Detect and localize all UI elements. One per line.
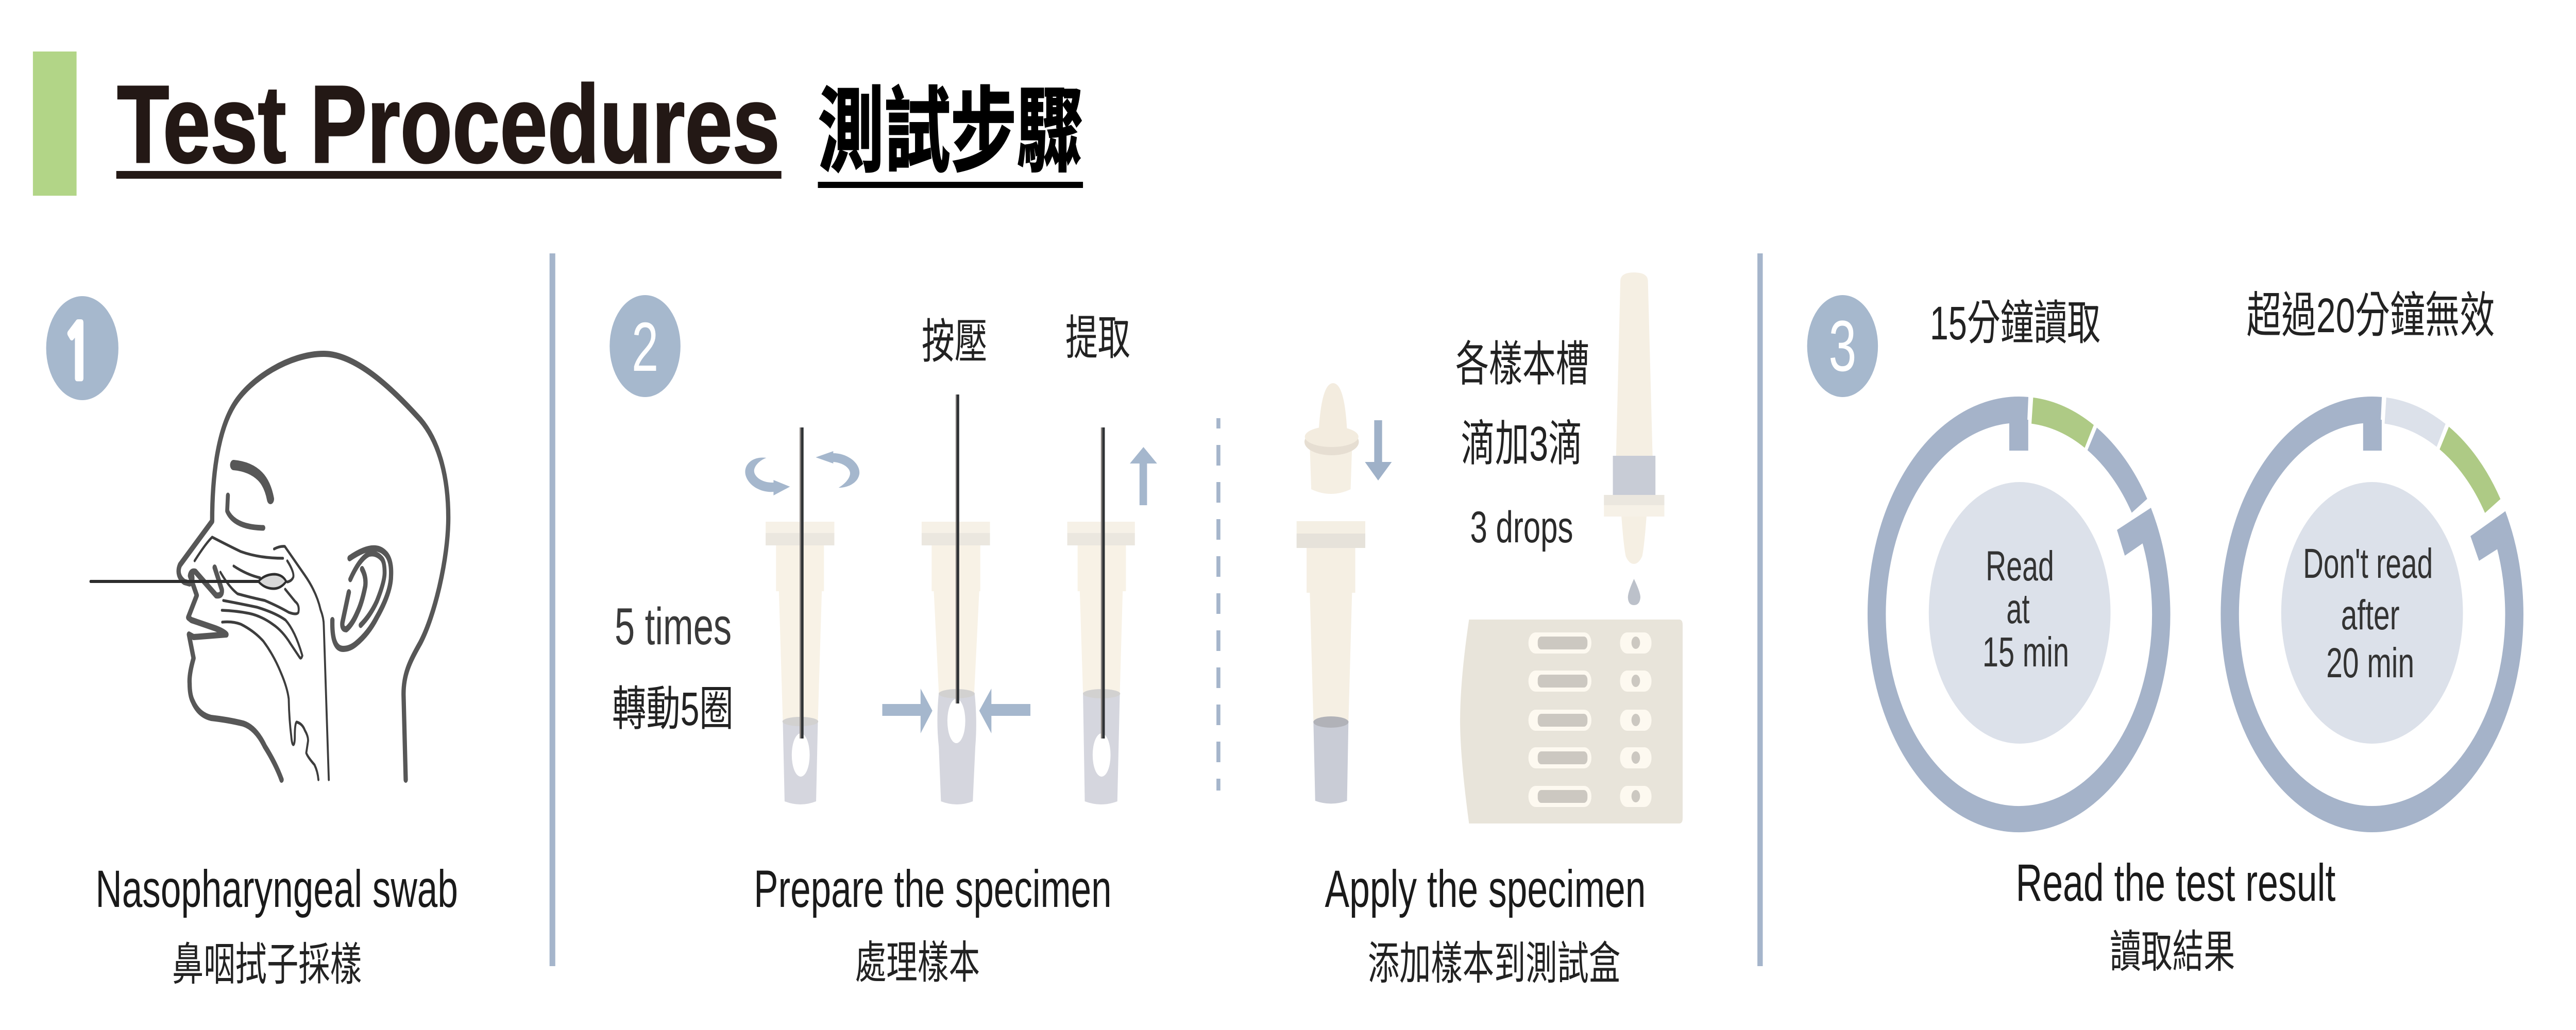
text: do not read after 20 min: 20 min bbox=[2326, 639, 2414, 686]
text: read at 15 min bbox=[1982, 542, 2069, 675]
label: Prepare the specimen: Prepare the specimen bbox=[754, 860, 1112, 918]
text: read at 15 min: Read bbox=[1986, 542, 2054, 589]
label: Read the test result: Read the test result bbox=[2016, 853, 2335, 912]
title accent bar bbox=[33, 52, 77, 196]
icon: test cassette bbox=[1460, 620, 1683, 823]
icon: dropper bbox=[1604, 272, 1665, 564]
panel: step 1 nasopharyngeal swab bbox=[46, 296, 458, 990]
label: Chinese result caption: 讀取結果 bbox=[2110, 926, 2235, 977]
label: Apply the specimen: Apply the specimen bbox=[1325, 860, 1646, 918]
text: read at 15 minutes Chinese: 15分鐘讀取 bbox=[1930, 296, 2100, 350]
panel: step 2 prepare the specimen bbox=[609, 295, 1157, 988]
panel: step 2 apply the specimen bbox=[1297, 272, 1683, 989]
text: 3 drops: 3 drops bbox=[1470, 502, 1573, 552]
text: rotate 5 times Chinese: 轉動5圈 bbox=[612, 682, 734, 735]
step number 2: 2 bbox=[632, 308, 658, 386]
title: Chinese heading: 測試步驟 bbox=[818, 80, 1083, 183]
step number 1: 1 bbox=[62, 315, 94, 390]
text: do not read after 20 min: Don't read bbox=[2303, 540, 2433, 587]
chart: 20 minute timer ring bbox=[2177, 334, 2567, 895]
panel: step 3 read the test result bbox=[1807, 288, 2567, 977]
arrow: cap down bbox=[1365, 420, 1392, 480]
icon: sample drop bbox=[1628, 579, 1640, 605]
step number 2 bbox=[609, 295, 681, 397]
text: extract: 提取 bbox=[1065, 311, 1130, 365]
arrow: squeeze from right bbox=[979, 689, 1030, 733]
text: press: 按壓 bbox=[922, 315, 988, 368]
arrow: squeeze from left bbox=[882, 689, 933, 733]
text: add 3 drops Chinese: 滴加3滴 bbox=[1461, 417, 1583, 471]
label: Chinese apply caption: 添加樣本到測試盒 bbox=[1368, 938, 1620, 989]
icon: rotation arrows bbox=[745, 451, 859, 495]
text: each sample well: 各樣本槽 bbox=[1455, 337, 1589, 391]
step number 3: 3 bbox=[1828, 305, 1856, 386]
label: Nasopharyngeal swab: Nasopharyngeal swab bbox=[95, 860, 458, 918]
text: 5 times: 5 times bbox=[615, 597, 732, 656]
tube: extracting swab bbox=[1067, 427, 1135, 804]
text: read at 15 min: at bbox=[2006, 585, 2030, 632]
title: English heading: Test Procedures bbox=[117, 63, 780, 186]
text: invalid after 20 minutes Chinese: 超過20分鐘無效 bbox=[2246, 288, 2495, 343]
icon: dropper cap bbox=[1304, 383, 1359, 494]
label: Chinese prepare caption: 處理樣本 bbox=[855, 937, 980, 988]
step number 1 bbox=[46, 296, 118, 400]
text: do not read after 20 min bbox=[2303, 540, 2433, 686]
step number 3 bbox=[1807, 295, 1878, 397]
tube: rotating swab bbox=[766, 427, 834, 804]
tube: pressing swab bbox=[922, 394, 990, 804]
label: Chinese swab caption: 鼻咽拭子採樣 bbox=[172, 939, 362, 990]
tube: filled specimen tube bbox=[1297, 521, 1365, 803]
chart: 15 minute timer ring bbox=[1824, 334, 2214, 895]
text: do not read after 20 min: after bbox=[2341, 591, 2400, 638]
text: read at 15 min: 15 min bbox=[1982, 628, 2069, 675]
arrow: lift up bbox=[1130, 447, 1157, 505]
icon: head profile with swab bbox=[91, 354, 448, 780]
